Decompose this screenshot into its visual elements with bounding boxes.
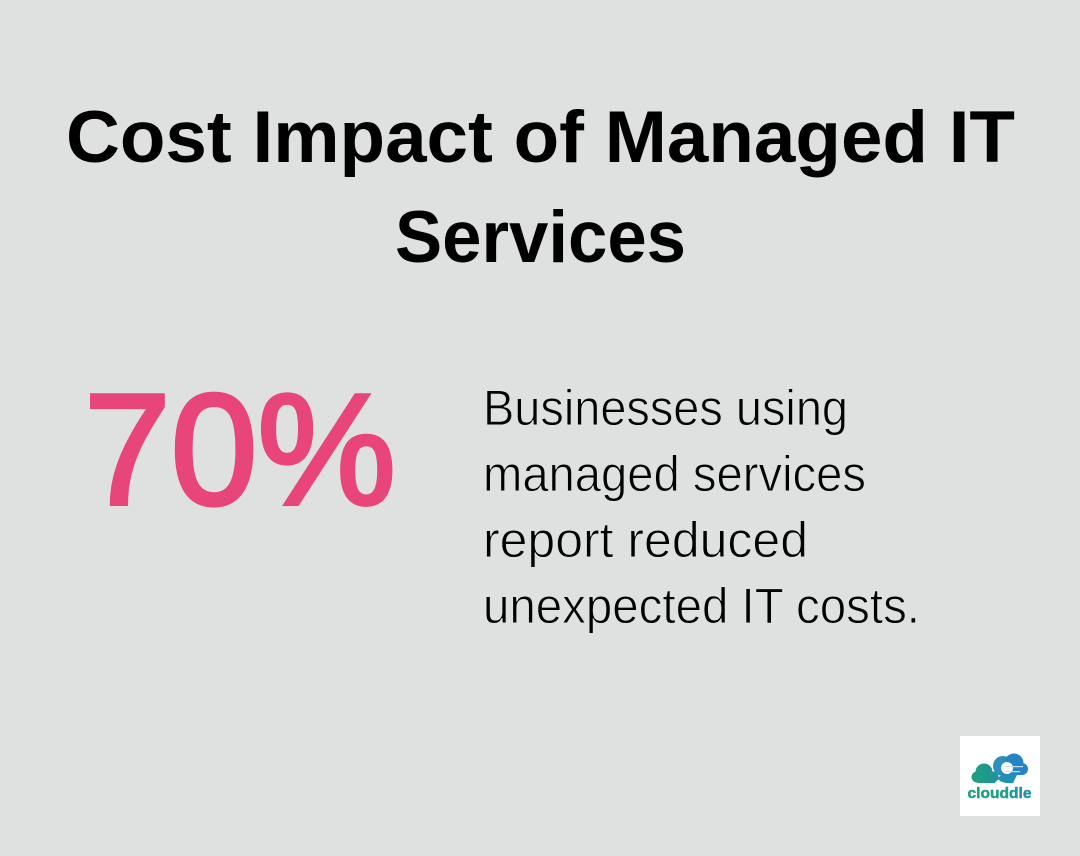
description text: report reduced bbox=[483, 512, 808, 568]
icon: blue cloud bbox=[993, 754, 1028, 783]
title: Cost Impact of Managed IT bbox=[66, 97, 1015, 178]
description text: Businesses using bbox=[483, 380, 848, 436]
description text bbox=[483, 380, 920, 634]
logo: clouddle bbox=[960, 736, 1040, 816]
crescent cut bbox=[1001, 762, 1013, 774]
logo wordmark: clouddle bbox=[968, 785, 1032, 802]
logo background bbox=[960, 736, 1040, 816]
description text: managed services bbox=[483, 446, 866, 502]
statistic: 70%: 70% bbox=[84, 362, 396, 538]
icon: green cloud bbox=[972, 764, 998, 783]
title: Services bbox=[395, 197, 686, 278]
title bbox=[66, 97, 1015, 278]
description text: unexpected IT costs. bbox=[483, 578, 920, 634]
